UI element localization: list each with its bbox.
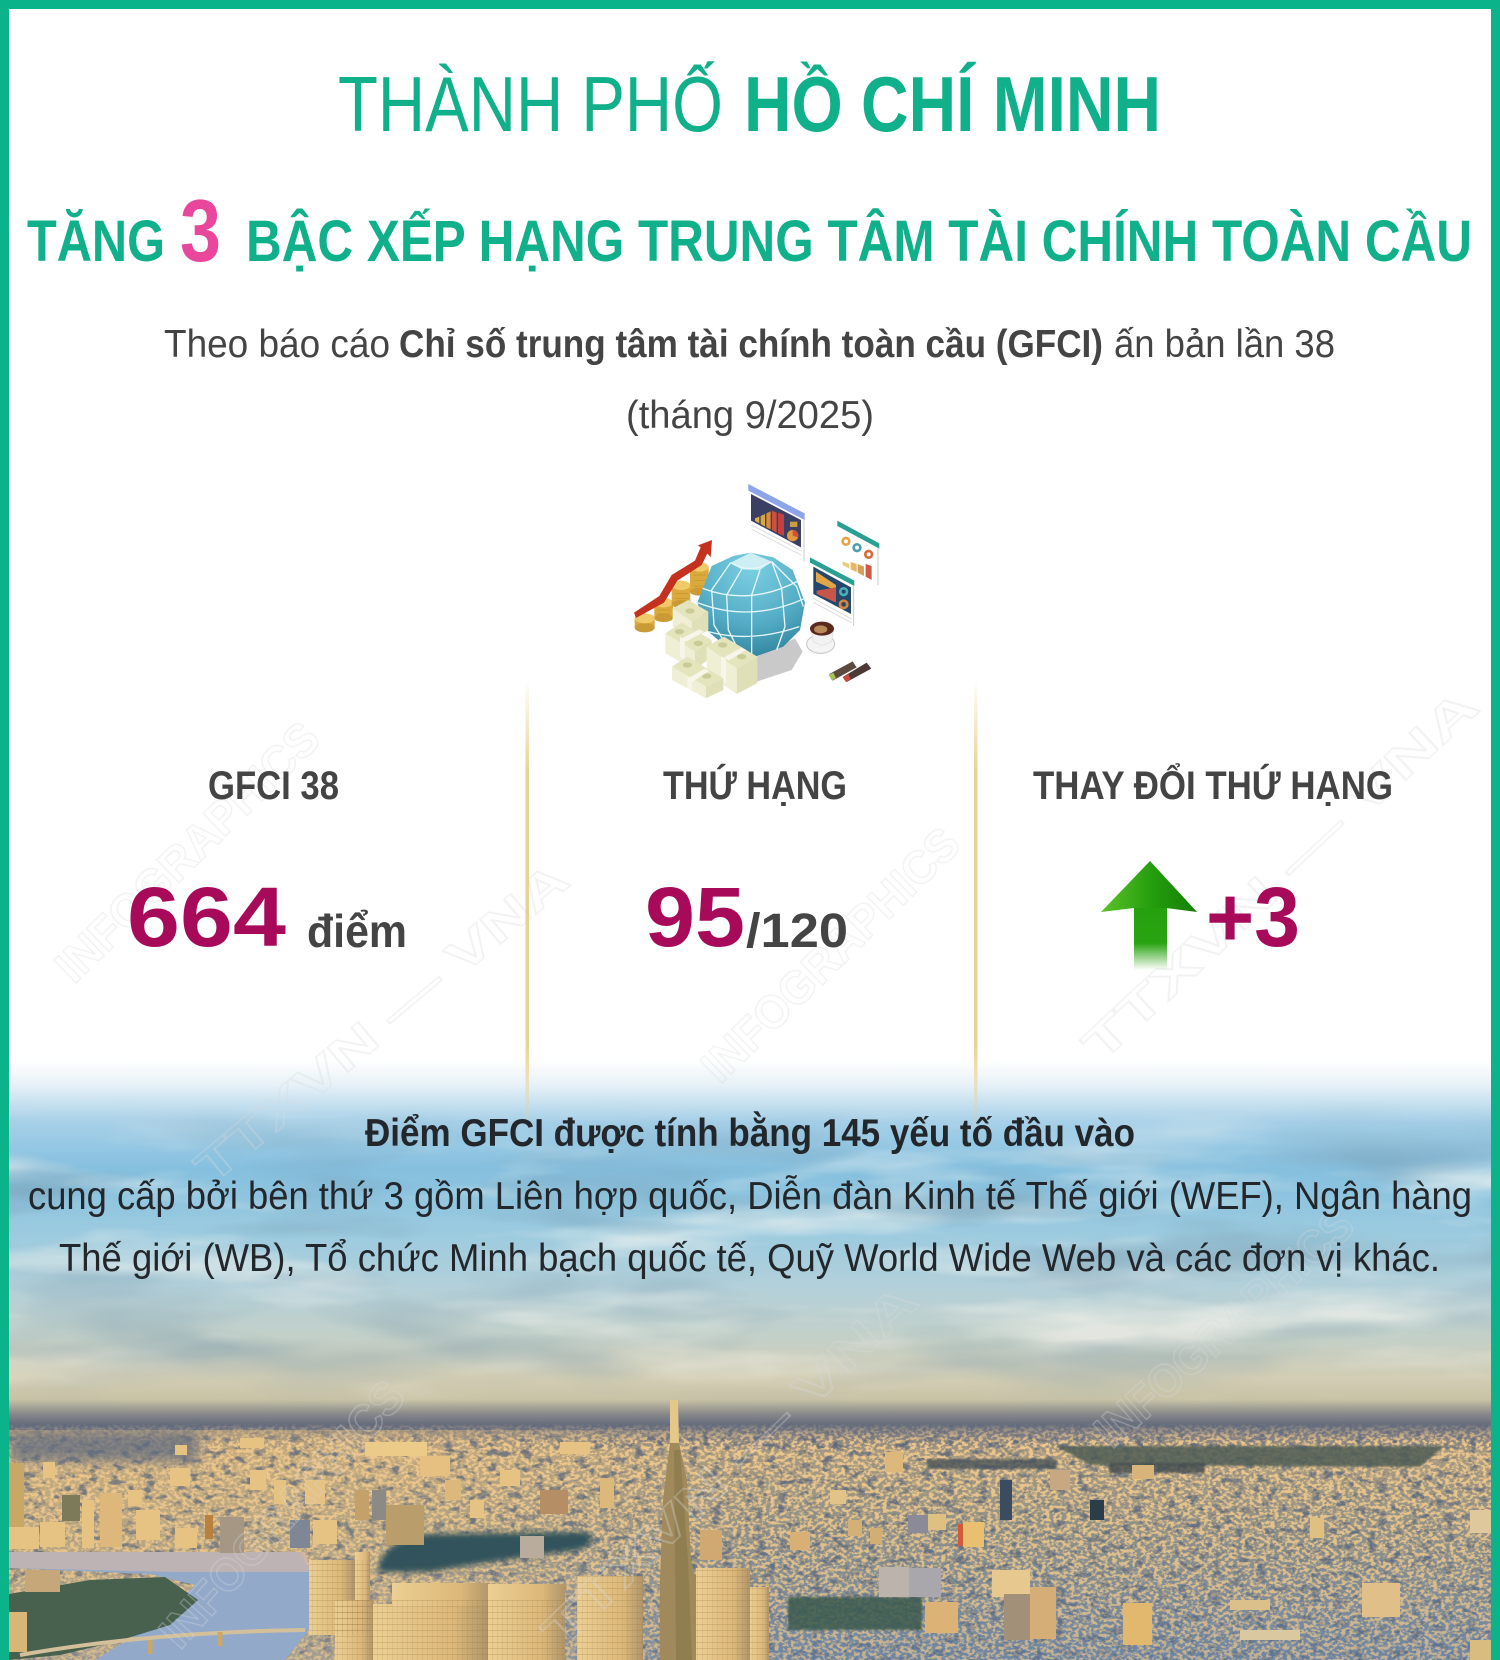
column: rank change xyxy=(1033,761,1393,970)
source text xyxy=(164,323,1335,437)
title xyxy=(338,60,1161,148)
bridge xyxy=(20,1630,305,1655)
globe xyxy=(697,553,805,657)
river xyxy=(9,1552,311,1660)
chart window 3 xyxy=(810,557,854,626)
chart window 1 xyxy=(748,484,805,562)
column: GFCI 38: GFCI 38 xyxy=(208,764,339,808)
column: rank change: +3 xyxy=(1206,870,1300,964)
column: rank: /120 xyxy=(746,905,848,958)
watermarks: INFOGRAPHICS xyxy=(45,712,330,992)
left distant buildings xyxy=(9,1438,722,1652)
source text: ấn bản lần 38 xyxy=(1114,323,1335,366)
landmark tower xyxy=(660,1400,696,1660)
right district buildings xyxy=(790,1452,1492,1660)
watermarks: INFOGRAPHICS xyxy=(1084,1198,1364,1457)
column: rank: 95 xyxy=(645,870,745,964)
watermarks xyxy=(45,679,1488,1658)
icon: finance globe illustration xyxy=(634,484,879,698)
photo: city skyline background xyxy=(0,1060,1500,1660)
icon: green up arrow xyxy=(1101,861,1197,970)
description text: Thế giới (WB), Tổ chức Minh bạch quốc tế, Quỹ World Wide Web và các đơn vị khác. xyxy=(59,1237,1440,1280)
chart window 2 xyxy=(837,521,879,585)
description text: Điểm GFCI được tính bằng 145 yếu tố đầu vào xyxy=(365,1111,1135,1155)
source text: Chỉ số trung tâm tài chính toàn cầu (GFCI) xyxy=(399,323,1103,366)
foreground golden towers xyxy=(309,1552,769,1660)
title: THÀNH PHỐ xyxy=(338,60,723,148)
source text: (tháng 9/2025) xyxy=(626,394,874,437)
column: rank xyxy=(645,762,848,964)
shadow xyxy=(757,638,803,682)
park behind towers xyxy=(378,1532,591,1572)
watermarks: INFOGRAPHICS xyxy=(149,1370,415,1658)
dividers xyxy=(526,680,978,1135)
subtitle headline: 3 xyxy=(180,181,221,280)
column: rank: THỨ HẠNG xyxy=(663,762,847,808)
watermarks: TTXVN — VNA xyxy=(185,852,578,1194)
watermarks: TTXVN — VNA xyxy=(532,1273,928,1658)
watermarks: INFOGRAPHICS xyxy=(691,817,970,1092)
column: GFCI 38: điểm xyxy=(307,905,407,957)
column: GFCI 38 xyxy=(127,764,407,964)
coffee cup xyxy=(807,622,835,653)
subtitle headline: TĂNG xyxy=(27,209,165,274)
coins and red arrow xyxy=(634,540,712,632)
money stacks xyxy=(665,600,757,698)
watermarks: TTXVN — VNA xyxy=(1072,679,1488,1071)
description text xyxy=(28,1111,1472,1280)
column: rank change: THAY ĐỔI THỨ HẠNG xyxy=(1033,761,1393,808)
source text: Theo báo cáo xyxy=(164,323,390,366)
park island xyxy=(9,1577,198,1660)
pens xyxy=(829,661,871,682)
column: GFCI 38: 664 xyxy=(127,870,286,964)
title: HỒ CHÍ MINH xyxy=(744,60,1161,148)
subtitle headline xyxy=(27,181,1472,280)
